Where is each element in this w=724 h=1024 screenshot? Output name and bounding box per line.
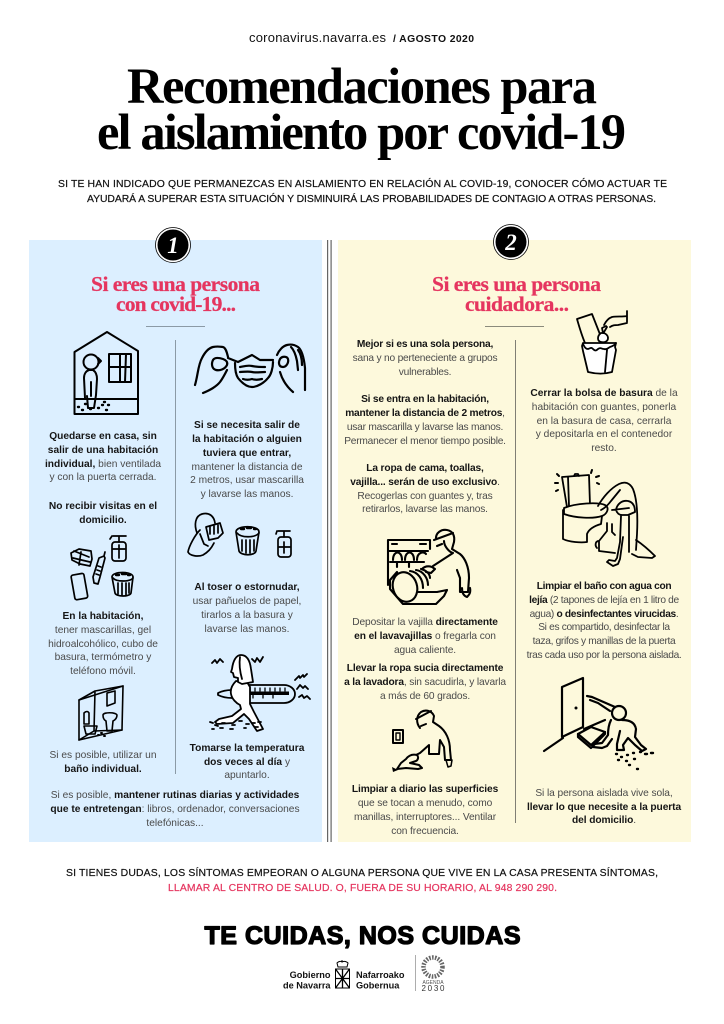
header url and date: [249, 30, 474, 45]
text: si se entra: Si se entra en la habitación,: [361, 394, 489, 405]
logo: Agenda 2030: [422, 958, 445, 993]
text: lavavajillas: agua caliente.: [394, 645, 456, 656]
logo: Agenda 2030: 2030: [422, 984, 445, 993]
badge 2: [494, 224, 528, 260]
logo: Gobierno de Navarra: Gobernua: [356, 980, 400, 990]
icon: coat of arms: [336, 960, 350, 988]
text: bolsa de basura: habitación con guantes, ponerla: [532, 402, 677, 413]
logo: Gobierno de Navarra: [283, 955, 416, 991]
text: lavavajillas: Depositar la vajilla directamente: [352, 617, 498, 628]
text: tomarse la temperatura: dos veces al día y: [204, 757, 291, 768]
text: en la habitación: En la habitación,: [63, 611, 144, 622]
title: [97, 58, 626, 160]
text: baño individual: [49, 750, 157, 775]
title: Recomendaciones para: [127, 58, 597, 114]
text: en la habitación: basura, termómetro y: [55, 652, 152, 663]
text: limpiar el baño: lejía (2 tapones de lejía en 1 litro de: [529, 595, 680, 606]
central double divider: [327, 240, 332, 842]
text: la ropa de cama: [350, 463, 500, 515]
text: ropa sucia: a la lavadora, sin sacudirla, y lavarla: [344, 677, 506, 688]
text: la ropa de cama: La ropa de cama, toallas,: [366, 463, 484, 474]
text: al toser: tirarlos a la basura y: [201, 610, 294, 621]
bottom notice: LLAMAR AL CENTRO DE SALUD. O, FUERA DE SU HORARIO, AL 948 290 290.: [168, 883, 557, 894]
text: al toser: [193, 582, 301, 635]
text: si se necesita salir: tuviera que entrar,: [203, 448, 291, 459]
text: tomarse la temperatura: apuntarlo.: [224, 770, 270, 781]
logo: Gobierno de Navarra: Nafarroako: [356, 970, 405, 980]
text: rutinas: telefónicas...: [146, 818, 204, 829]
heading: cuidadora...: [465, 292, 569, 316]
icon: woman with thermometer: [210, 655, 310, 731]
heading: con covid-19...: [116, 292, 236, 316]
text: sola persona: sana y no perteneciente a grupos: [353, 353, 498, 364]
text: limpiar el baño: agua) o desinfectantes virucidas.: [530, 609, 678, 620]
icon: mask: [195, 345, 305, 393]
text: limpiar el baño: taza, grifos y manillas de la puerta: [533, 636, 676, 647]
text: la ropa de cama: vajilla... serán de uso exclusivo.: [350, 477, 500, 488]
text: la ropa de cama: Recogerlas con guantes y, tras: [357, 491, 493, 502]
icon: trash bag: [577, 311, 627, 374]
text: la ropa de cama: retirarlos, lavarse las manos.: [362, 504, 488, 515]
text: superficies: con frecuencia.: [391, 826, 459, 837]
text: superficies: Limpiar a diario las superficies: [352, 784, 499, 795]
text: bolsa de basura: Cerrar la bolsa de basura de la: [530, 388, 678, 399]
text: persona aislada: [527, 788, 681, 826]
text: si se entra: [344, 394, 506, 447]
panel: persona con covid-19: [29, 228, 322, 842]
text: persona aislada: del domicilio.: [572, 815, 636, 826]
panel: persona cuidadora: [338, 224, 691, 842]
text: rutinas: Si es posible, mantener rutinas diarias y actividades: [51, 790, 300, 801]
text: tomarse la temperatura: [190, 743, 305, 781]
text: lavavajillas: [352, 617, 498, 656]
logo: Gobierno de Navarra: de Navarra: [283, 980, 331, 990]
text: quedarse en casa: salir de una habitación: [48, 445, 158, 456]
icon: cleaning surfaces: [392, 711, 452, 772]
heading: Si eres una persona: [91, 272, 260, 296]
intro text: AYUDARÁ A SUPERAR ESTA SITUACIÓN Y DISMINUIRÁ LAS PROBABILIDADES DE CONTAGIO A OTRAS PERSONAS.: [87, 192, 656, 205]
text: ropa sucia: [344, 663, 506, 702]
icon: dishwasher: [388, 530, 470, 605]
text: rutinas: [50, 790, 300, 829]
logo: Gobierno de Navarra: Gobierno: [290, 970, 331, 980]
text: si se entra: Permanecer el menor tiempo posible.: [344, 436, 506, 447]
text: si se entra: mantener la distancia de 2 metros,: [345, 408, 505, 419]
intro text: SI TE HAN INDICADO QUE PERMANEZCAS EN AISLAMIENTO EN RELACIÓN AL COVID-19, CONOCER CÓMO ACTUAR TE: [58, 177, 667, 190]
text: sola persona: Mejor si es una sola persona,: [357, 339, 494, 350]
text: limpiar el baño: Limpiar el baño con agua con: [537, 581, 671, 592]
heading: Si eres una persona: [432, 272, 601, 296]
column divider: [175, 340, 176, 774]
slogan: TE CUIDAS, NOS CUIDAS: [204, 922, 520, 950]
text: en la habitación: teléfono móvil.: [70, 666, 136, 677]
text: superficies: que se tocan a menudo, como: [358, 798, 493, 809]
text: bolsa de basura: resto.: [591, 443, 617, 454]
text: no recibir visitas: [49, 501, 157, 526]
icon: cleaning toilet: [555, 470, 655, 566]
text: si se necesita salir: [190, 420, 304, 500]
text: baño individual: Si es posible, utilizar un: [49, 750, 157, 761]
text: bolsa de basura: [530, 388, 678, 454]
text: en la habitación: hidroalcohólico, cubo de: [48, 639, 158, 650]
icon: room items: [71, 536, 133, 600]
text: al toser: lavarse las manos.: [205, 624, 289, 635]
text: bolsa de basura: y depositarla en el contenedor: [536, 429, 673, 440]
text: limpiar el baño: [527, 581, 681, 661]
intro text: [58, 177, 667, 205]
text: quedarse en casa: y con la puerta cerrada.: [49, 472, 157, 483]
text: al toser: usar pañuelos de papel,: [193, 596, 301, 607]
text: al toser: Al toser o estornudar,: [194, 582, 300, 593]
text: no recibir visitas: No recibir visitas en el: [49, 501, 157, 512]
text: superficies: manillas, interruptores... Ventilar: [354, 812, 497, 823]
text: si se necesita salir: la habitación o alguien: [192, 434, 302, 445]
text: quedarse en casa: Quedarse en casa, sin: [49, 431, 157, 442]
bottom notice: [66, 866, 658, 894]
text: si se necesita salir: Si se necesita salir de: [194, 420, 300, 431]
badge 2: 2: [504, 230, 517, 255]
text: quedarse en casa: [45, 431, 161, 483]
text: sola persona: vulnerables.: [399, 367, 451, 378]
icon: cough, bin, gel: [188, 513, 291, 557]
bottom notice: SI TIENES DUDAS, LOS SÍNTOMAS EMPEORAN O ALGUNA PERSONA QUE VIVE EN LA CASA PRESENTA SÍNTOMAS,: [66, 866, 658, 879]
text: quedarse en casa: individual, bien ventilada: [45, 459, 161, 470]
text: bolsa de basura: en la basura de casa, cerrarla: [537, 416, 672, 427]
text: lavavajillas: en el lavavajillas o fregarla con: [354, 631, 496, 642]
text: ropa sucia: Llevar la ropa sucia directamente: [347, 663, 504, 674]
text: si se necesita salir: mantener la distancia de: [192, 462, 303, 473]
text: limpiar el baño: Si es compartido, desinfectar la: [538, 622, 670, 633]
text: sola persona: [353, 339, 498, 378]
icon: house: [74, 332, 138, 414]
text: en la habitación: [48, 611, 158, 677]
text: superficies: [352, 784, 499, 837]
icon: door delivery: [544, 678, 653, 769]
heading: [91, 272, 260, 327]
icon: bathroom cube: [79, 686, 123, 740]
text: limpiar el baño: tras cada uso por la persona aislada.: [527, 650, 681, 661]
logo: Agenda 2030: AGENDA: [422, 980, 444, 986]
text: no recibir visitas: domicilio.: [79, 515, 127, 526]
text: ropa sucia: a más de 60 grados.: [380, 691, 470, 702]
header url and date: / AGOSTO 2020: [393, 34, 474, 45]
badge 1: [156, 228, 190, 262]
header url and date: coronavirus.navarra.es: [249, 30, 386, 45]
text: rutinas: que te entretengan: libros, ordenador, conversaciones: [50, 804, 300, 815]
title: el aislamiento por covid-19: [97, 104, 626, 160]
text: si se necesita salir: y lavarse las manos.: [201, 489, 293, 500]
text: baño individual: baño individual.: [64, 764, 142, 775]
heading: [432, 272, 601, 327]
text: persona aislada: llevar lo que necesite a la puerta: [527, 802, 681, 813]
text: si se necesita salir: 2 metros, usar mascarilla: [190, 475, 304, 486]
column divider: [515, 340, 516, 823]
badge 1: 1: [167, 233, 179, 258]
text: tomarse la temperatura: Tomarse la temperatura: [190, 743, 305, 754]
text: persona aislada: Si la persona aislada vive sola,: [535, 788, 673, 799]
text: si se entra: usar mascarilla y lavarse las manos.: [347, 422, 503, 433]
text: en la habitación: tener mascarillas, gel: [55, 625, 151, 636]
